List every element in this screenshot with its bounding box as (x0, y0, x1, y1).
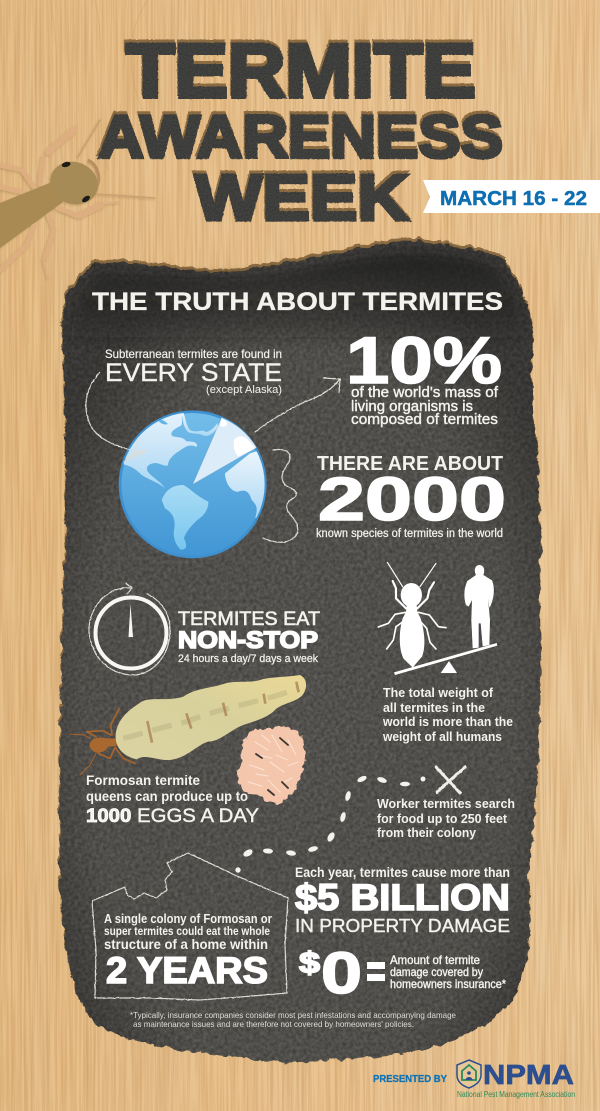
date banner (423, 180, 600, 213)
text: total weight: all termites in the (383, 700, 485, 715)
text: 10 percent: living organisms is (351, 399, 473, 415)
text: worker termites: from their colony (377, 825, 477, 840)
text: every state: (except Alaska) (206, 384, 282, 396)
text: 2000 species: THERE ARE ABOUT (317, 452, 503, 475)
text: every state (105, 347, 282, 396)
heading: the truth about termites: THE TRUTH ABOUT TERMITES (92, 288, 503, 316)
human silhouette (464, 565, 494, 648)
icon: termite worker on wood (0, 120, 155, 278)
chalk arrow: every state to globe (86, 372, 147, 462)
text: two years: structure of a home within (104, 937, 268, 952)
termite silhouette (378, 562, 446, 668)
text: 2000 species: known species of termites in the world (316, 528, 503, 540)
text: queens eggs (86, 772, 259, 827)
title: AWARENESS (98, 104, 503, 170)
text: zero dollars: Amount of termite (390, 953, 480, 967)
north america land (124, 413, 218, 488)
text: 10 percent (346, 323, 502, 428)
text: worker termites: for food up to 250 feet (377, 811, 508, 826)
date banner: MARCH 16 - 22 (440, 188, 587, 210)
footnote: *Typically, insurance companies consider most pest infestations and accompanying damage (130, 1010, 456, 1020)
text: queens eggs: queens can produce up to (86, 788, 248, 804)
footnote: as maintenance issues and are therefore not covered by homeowners' policies. (133, 1019, 414, 1029)
text: zero dollars: 0 (321, 941, 362, 1006)
text: two years: A single colony of Formosan or (104, 911, 272, 926)
text: zero dollars: damage covered by (390, 965, 483, 979)
footnote (130, 1010, 456, 1029)
text: termites eat non-stop: TERMITES EAT (178, 609, 320, 630)
text: total weight (382, 685, 513, 744)
icon: shield (457, 1060, 481, 1088)
title: TERMITE (126, 29, 476, 114)
icon: termite queen (70, 675, 306, 775)
title (98, 29, 503, 234)
text: two years: super termites could eat the whole (104, 924, 270, 938)
scale beam (394, 643, 497, 675)
chalk house outline (92, 853, 288, 1000)
text: 2000 species: 2000 (318, 465, 506, 533)
text: five billion: Each year, termites cause more than (295, 865, 510, 880)
termite trail dots (235, 775, 426, 873)
text: queens eggs: 1000 EGGS A DAY (86, 806, 259, 827)
text: two years: 2 YEARS (106, 950, 268, 991)
text: 2000 species (316, 452, 506, 540)
panel: stone board (59, 238, 540, 1062)
text: worker termites: Worker termites search (377, 796, 515, 811)
text: termites eat non-stop: 24 hours a day/7 days a week (178, 653, 318, 665)
south america land (162, 485, 208, 550)
text: queens eggs: Formosan termite (86, 772, 200, 788)
icon: egg cluster (237, 727, 305, 804)
title: WEEK (195, 161, 409, 234)
presented by: PRESENTED BY (373, 1074, 447, 1085)
icon: termite and human on scale (378, 562, 497, 675)
text: every state: Subterranean termites are found in (105, 347, 282, 361)
logo: npma: NPMA (483, 1059, 574, 1090)
text: termites eat non-stop: NON-STOP (178, 627, 318, 654)
text: five billion (295, 865, 510, 936)
logo: npma (457, 1059, 575, 1099)
pie slice (193, 418, 257, 484)
scale pivot (441, 661, 457, 673)
text: 10 percent: composed of termites (351, 412, 498, 428)
chalk squiggle: globe to 2000 (263, 450, 298, 542)
text: total weight: weight of all humans (382, 729, 502, 744)
logo: npma: National Pest Management Association (457, 1090, 575, 1099)
text: total weight: world is more than the (382, 714, 513, 729)
text: 10 percent: 10% (346, 323, 502, 397)
text: zero dollars (299, 941, 506, 1006)
icon: chalk x mark (436, 767, 465, 793)
text: 10 percent: of the world's mass of (351, 385, 499, 401)
icon: clock (89, 583, 170, 675)
text: every state: EVERY STATE (105, 359, 282, 387)
chalk arrow: globe to 10 percent (255, 378, 340, 432)
text: five billion: $5 BILLION (295, 877, 510, 918)
text: two years (104, 911, 272, 991)
africa land (225, 451, 265, 518)
icon: globe with pie slice (118, 410, 267, 558)
text: zero dollars: homeowners insurance* (390, 977, 506, 991)
text: zero dollars: $ (299, 947, 320, 980)
text: worker termites (377, 796, 515, 840)
text: total weight: The total weight of (383, 685, 494, 700)
text: five billion: IN PROPERTY DAMAGE (295, 915, 510, 936)
text: termites eat non-stop (178, 609, 320, 665)
